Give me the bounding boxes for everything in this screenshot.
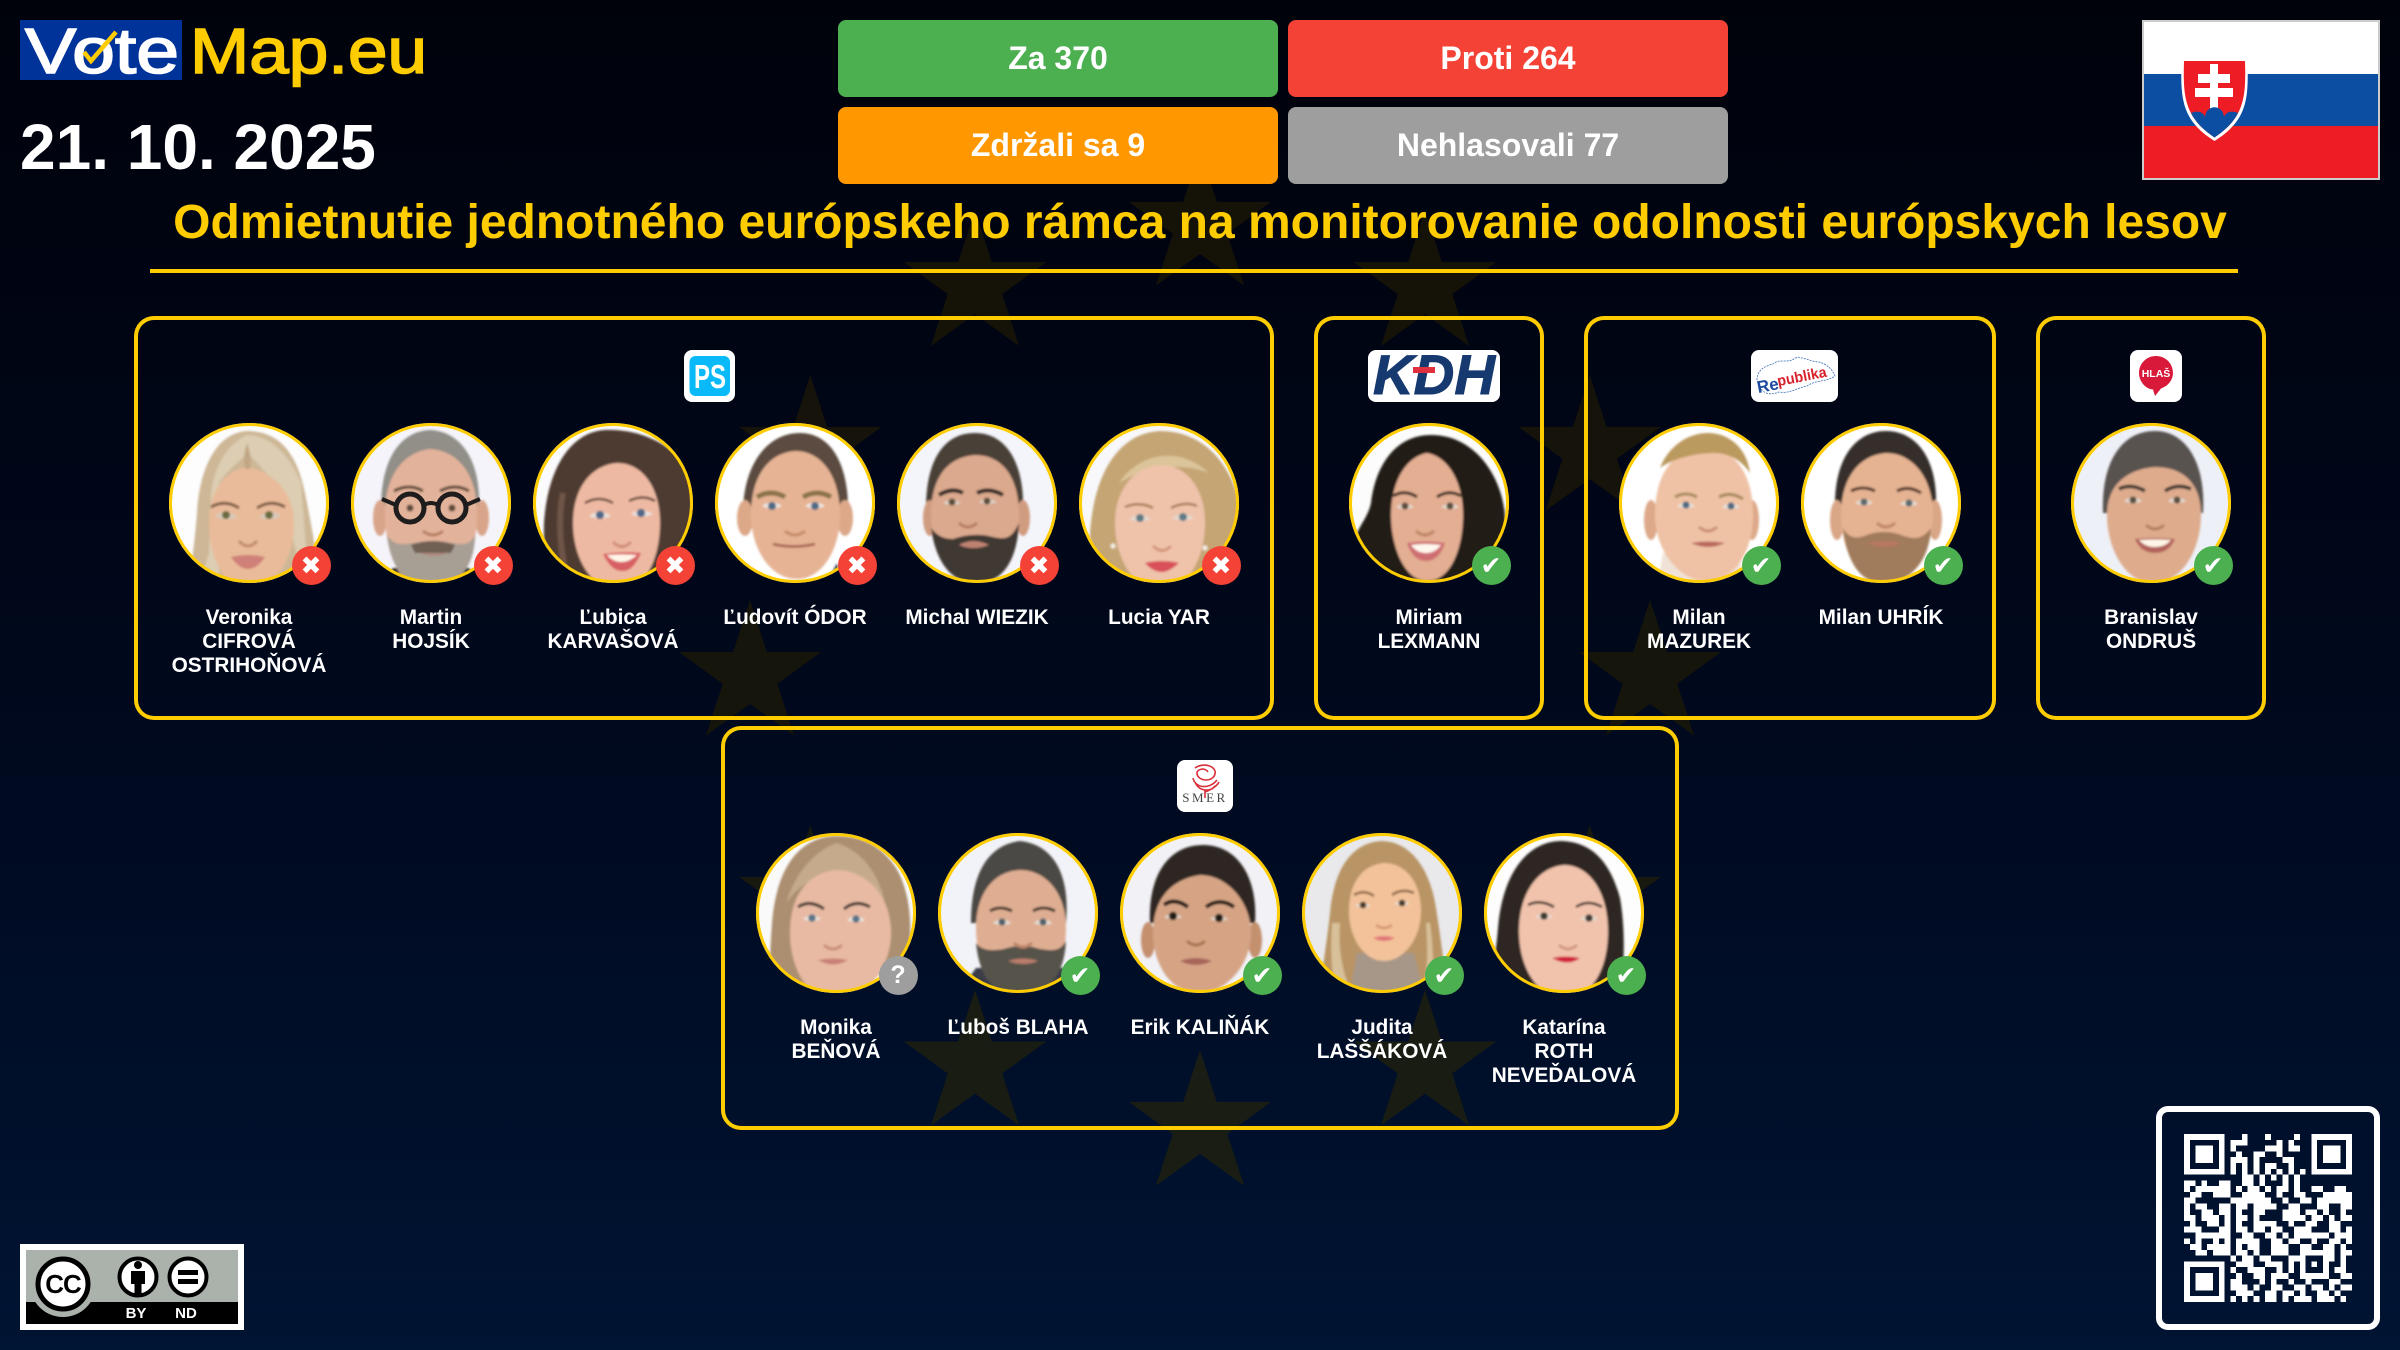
name: Monika xyxy=(800,1016,872,1039)
badge: for xyxy=(1424,956,1464,995)
name: Ľuboš BLAHA xyxy=(948,1016,1088,1039)
icon: Creative Commons BY-ND licence badge xyxy=(20,1244,244,1330)
name: OSTRIHOŇOVÁ xyxy=(172,654,326,677)
vote total: did not vote xyxy=(1288,107,1728,184)
party logo: Republika: publika xyxy=(1776,364,1829,390)
badge: did not vote xyxy=(878,956,918,995)
name: Lucia YAR xyxy=(1108,606,1210,629)
member: Ľubica Karvašová xyxy=(533,423,695,653)
icon: Slovak flag xyxy=(2142,20,2380,180)
QR code xyxy=(2156,1106,2380,1330)
badge: for xyxy=(2194,546,2232,585)
vote total: abstained xyxy=(838,107,1278,184)
date: 21. 10. 2025 xyxy=(20,111,376,183)
name: Martin xyxy=(400,606,462,629)
badge: against: ✖ xyxy=(301,551,321,580)
party logo: Smer xyxy=(1177,760,1233,812)
vote total: for: Za 370 xyxy=(1008,40,1108,76)
badge: for: ✔ xyxy=(1252,961,1272,990)
badge: for: ✔ xyxy=(2203,551,2223,580)
name: ROTH xyxy=(1535,1040,1593,1063)
badge: against xyxy=(1202,546,1240,585)
member: Branislav Ondruš xyxy=(2071,423,2233,653)
name: CIFROVÁ xyxy=(202,630,296,653)
panel: Hlas xyxy=(2036,316,2266,720)
badge: against xyxy=(474,546,512,585)
badge: against xyxy=(838,546,876,585)
name xyxy=(1647,606,1751,653)
logo: VoteMap.eu xyxy=(20,20,427,88)
member: Katarína Roth Neveďalová xyxy=(1484,833,1646,1087)
party logo: PS xyxy=(684,350,734,402)
name xyxy=(1317,1016,1447,1063)
name: Branislav xyxy=(2104,606,2198,629)
party logo: Republika xyxy=(1751,350,1838,402)
badge: for xyxy=(1606,956,1646,995)
name: Ľudovít ÓDOR xyxy=(723,606,867,629)
badge: for: ✔ xyxy=(1481,551,1501,580)
member: Milan Uhrík xyxy=(1801,423,1963,629)
name: Ľubica xyxy=(579,606,647,629)
member: Ľudovít Ódor xyxy=(715,423,877,629)
member: Erik Kaliňák xyxy=(1120,833,1282,1039)
panel: Smer xyxy=(721,726,1679,1130)
vote total: abstained: Zdržali sa 9 xyxy=(971,127,1145,163)
name: HOJSÍK xyxy=(392,630,470,653)
member: Michal Wiezik xyxy=(897,423,1059,629)
name xyxy=(792,1016,880,1063)
badge: for xyxy=(1742,546,1780,585)
name xyxy=(548,606,678,653)
badge: for xyxy=(1242,956,1282,995)
badge: against xyxy=(292,546,330,585)
badge: for: ✔ xyxy=(1751,551,1771,580)
name: ONDRUŠ xyxy=(2106,630,2196,653)
name: Katarína xyxy=(1522,1016,1606,1039)
vote total: against: Proti 264 xyxy=(1440,40,1576,76)
name: Miriam xyxy=(1395,606,1463,629)
name xyxy=(172,606,326,677)
vote total: did not vote: Nehlasovali 77 xyxy=(1397,127,1619,163)
name: Erik KALIŇÁK xyxy=(1131,1016,1269,1039)
badge: for: ✔ xyxy=(1616,961,1636,990)
party logo: Smer: SMER xyxy=(1182,790,1228,805)
name: MAZUREK xyxy=(1647,630,1751,653)
panel: KDH xyxy=(1314,316,1544,720)
name: NEVEĎALOVÁ xyxy=(1492,1064,1636,1087)
badge: for xyxy=(1060,956,1100,995)
icon: Creative Commons BY-ND licence badge: ND xyxy=(175,1305,197,1322)
name xyxy=(1492,1016,1636,1087)
panel: Republika xyxy=(1584,316,1996,720)
badge: against: ✖ xyxy=(1029,551,1049,580)
name: Milan xyxy=(1672,606,1726,629)
name: LEXMANN xyxy=(1378,630,1480,653)
badge: against: ✖ xyxy=(665,551,685,580)
name: Judita xyxy=(1351,1016,1413,1039)
badge: against: ✖ xyxy=(847,551,867,580)
party logo: Republika: Re xyxy=(1755,374,1780,397)
badge: for xyxy=(1472,546,1510,585)
member: Veronika Cifrová Ostrihoňová xyxy=(169,423,331,677)
badge: for: ✔ xyxy=(1933,551,1953,580)
name: BEŇOVÁ xyxy=(792,1040,880,1063)
badge: did not vote: ? xyxy=(890,961,906,989)
badge: for xyxy=(1924,546,1962,585)
name xyxy=(392,606,470,653)
name: KARVAŠOVÁ xyxy=(548,630,678,653)
name: LAŠŠÁKOVÁ xyxy=(1317,1040,1447,1063)
badge: for: ✔ xyxy=(1070,961,1090,990)
vote total: against xyxy=(1288,20,1728,97)
badge: against xyxy=(1020,546,1058,585)
name: Milan UHRÍK xyxy=(1819,606,1943,629)
name: Veronika xyxy=(206,606,292,629)
panel: PS xyxy=(134,316,1274,720)
title: Odmietnutie jednotného európskeho rámca na monitorovanie odolnosti európskych lesov xyxy=(173,196,2227,249)
badge: for: ✔ xyxy=(1434,961,1454,990)
name xyxy=(2104,606,2198,653)
icon: Creative Commons BY-ND licence badge: BY xyxy=(126,1305,146,1322)
member: Ľuboš Blaha xyxy=(938,833,1100,1039)
title underline xyxy=(150,269,2238,273)
member: Monika Beňová xyxy=(756,833,918,1063)
badge: against: ✖ xyxy=(483,551,503,580)
vote total: for xyxy=(838,20,1278,97)
name xyxy=(1378,606,1480,653)
member: Lucia Yar xyxy=(1079,423,1241,629)
party logo: Hlas xyxy=(2130,350,2182,402)
icon: Creative Commons BY-ND licence badge: CC xyxy=(45,1269,82,1299)
badge: against: ✖ xyxy=(1211,551,1231,580)
party logo: Hlas: HLAŠ xyxy=(2142,367,2170,380)
member: Judita Laššáková xyxy=(1302,833,1464,1063)
badge: against xyxy=(656,546,694,585)
name: Michal WIEZIK xyxy=(905,606,1049,629)
member: Miriam Lexmann xyxy=(1349,423,1511,653)
member: Martin Hojsík xyxy=(351,423,513,653)
member: Milan Mazurek xyxy=(1619,423,1781,653)
